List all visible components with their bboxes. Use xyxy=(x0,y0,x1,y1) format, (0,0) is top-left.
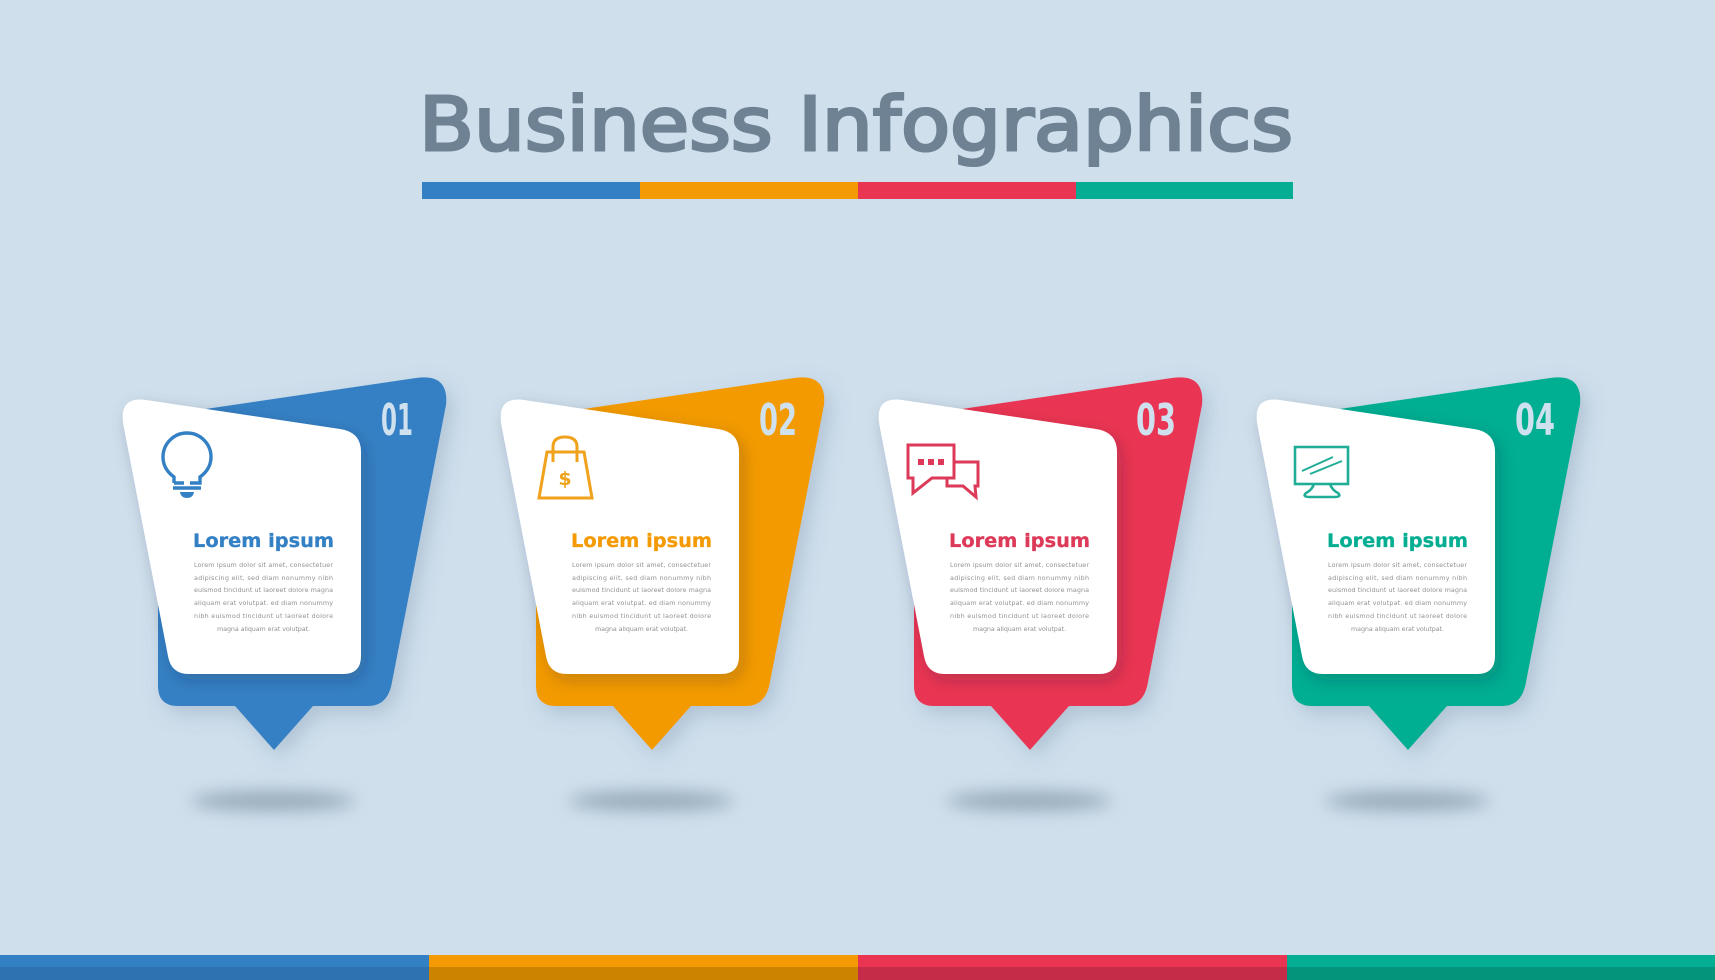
icon: chat bubbles xyxy=(908,445,978,497)
bottom colour band xyxy=(0,955,1715,980)
body text: nibh euismod tincidunt ut laoreet dolore xyxy=(950,612,1089,620)
body text: adipiscing elit, sed diam nonummy nibh xyxy=(950,574,1089,582)
floor shadow xyxy=(191,791,355,811)
body text: Lorem ipsum dolor sit amet, consectetuer xyxy=(572,561,711,569)
green pin shape xyxy=(1292,377,1580,750)
body text: Lorem ipsum dolor sit amet, consectetuer xyxy=(194,561,333,569)
white card xyxy=(879,400,1117,674)
title colour bar xyxy=(422,182,1293,199)
body text: adipiscing elit, sed diam nonummy nibh xyxy=(572,574,711,582)
floor shadow xyxy=(569,791,733,811)
body text xyxy=(194,561,333,633)
panel: step 04 xyxy=(1257,377,1580,811)
floor shadow xyxy=(1325,791,1489,811)
body text: magna aliquam erat volutpat. xyxy=(595,625,688,633)
white card xyxy=(1257,400,1495,674)
body text: euismod tincidunt ut laoreet dolore magna xyxy=(950,586,1089,594)
icon: light bulb xyxy=(163,433,211,498)
body text: adipiscing elit, sed diam nonummy nibh xyxy=(194,574,333,582)
white card xyxy=(501,400,739,674)
body text: nibh euismod tincidunt ut laoreet dolore xyxy=(194,612,333,620)
heading: Lorem ipsum xyxy=(1327,530,1468,552)
body text: aliquam erat volutpat. ed diam nonummy xyxy=(572,599,711,607)
title: Business Infographics xyxy=(419,82,1293,168)
body text: nibh euismod tincidunt ut laoreet dolore xyxy=(572,612,711,620)
panel: step 02 xyxy=(501,377,824,811)
body text: aliquam erat volutpat. ed diam nonummy xyxy=(950,599,1089,607)
number: 03 xyxy=(1136,395,1176,446)
orange pin shape xyxy=(536,377,824,750)
body text: magna aliquam erat volutpat. xyxy=(217,625,310,633)
number: 01 xyxy=(381,395,413,446)
body text: Lorem ipsum dolor sit amet, consectetuer xyxy=(1328,561,1467,569)
heading: Lorem ipsum xyxy=(193,530,334,552)
body text: nibh euismod tincidunt ut laoreet dolore xyxy=(1328,612,1467,620)
panel: step 01 xyxy=(123,377,446,811)
body text: adipiscing elit, sed diam nonummy nibh xyxy=(1328,574,1467,582)
panel: step 03 xyxy=(879,377,1202,811)
body text: aliquam erat volutpat. ed diam nonummy xyxy=(194,599,333,607)
icon: shopping bag xyxy=(539,437,592,498)
body text: euismod tincidunt ut laoreet dolore magna xyxy=(194,586,333,594)
heading: Lorem ipsum xyxy=(949,530,1090,552)
floor shadow xyxy=(947,791,1111,811)
heading: Lorem ipsum xyxy=(571,530,712,552)
body text: aliquam erat volutpat. ed diam nonummy xyxy=(1328,599,1467,607)
number: 02 xyxy=(759,395,797,446)
red pin shape xyxy=(914,377,1202,750)
body text: euismod tincidunt ut laoreet dolore magna xyxy=(572,586,711,594)
icon: desktop monitor xyxy=(1295,447,1348,497)
number: 04 xyxy=(1515,395,1555,446)
icon: shopping bag: $ xyxy=(558,468,572,490)
body text: euismod tincidunt ut laoreet dolore magna xyxy=(1328,586,1467,594)
body text: magna aliquam erat volutpat. xyxy=(973,625,1066,633)
white card xyxy=(123,400,361,674)
blue pin shape xyxy=(158,377,446,750)
body text xyxy=(1328,561,1467,633)
body text: Lorem ipsum dolor sit amet, consectetuer xyxy=(950,561,1089,569)
body text xyxy=(572,561,711,633)
body text xyxy=(950,561,1089,633)
body text: magna aliquam erat volutpat. xyxy=(1351,625,1444,633)
